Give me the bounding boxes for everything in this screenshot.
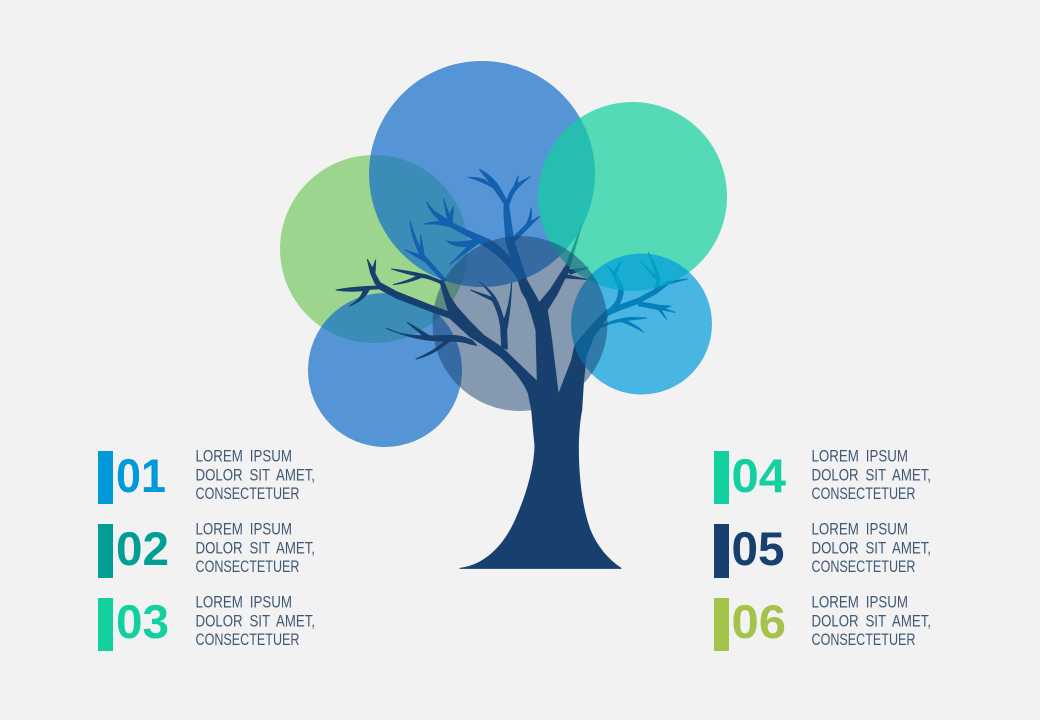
circle: lower-left blue: [308, 293, 462, 447]
text 03: DOLOR SIT AMET,: [196, 612, 315, 630]
lower-left branch: [387, 322, 477, 359]
text 06: DOLOR SIT AMET,: [812, 612, 931, 630]
bar 01: [98, 451, 113, 504]
text 04: DOLOR SIT AMET,: [812, 466, 931, 484]
number 06: 06: [732, 595, 786, 648]
circle: cyan: [571, 254, 712, 394]
text 06: [812, 594, 931, 649]
item 01: [98, 448, 315, 504]
text 02: [196, 520, 315, 576]
circle: top blue: [369, 61, 595, 287]
number 01: 01: [116, 449, 166, 502]
text 06: LOREM IPSUM: [812, 594, 908, 612]
mid-left navy twigs: [392, 269, 443, 285]
text 02: CONSECTETUER: [196, 558, 300, 576]
item 03: [98, 594, 315, 651]
text 05: [812, 520, 931, 576]
text 01: LOREM IPSUM: [196, 448, 292, 466]
text 04: LOREM IPSUM: [812, 448, 908, 466]
circle: centre grey-navy: [432, 236, 608, 411]
bar 06: [714, 598, 729, 651]
right upward branch: [607, 261, 623, 313]
number 05: 05: [732, 522, 784, 575]
bar 02: [98, 524, 113, 578]
bar 03: [98, 598, 113, 651]
number 04: 04: [732, 449, 786, 502]
tree trunk and main limbs: [367, 203, 687, 568]
text 03: CONSECTETUER: [196, 631, 300, 649]
item 05: [714, 520, 931, 578]
text 04: [812, 448, 931, 503]
text 02: DOLOR SIT AMET,: [196, 540, 315, 558]
text 01: DOLOR SIT AMET,: [196, 466, 315, 484]
bar 04: [714, 451, 729, 504]
circle: teal: [538, 102, 727, 291]
inner sub-branch: [471, 282, 512, 349]
item 02: [98, 520, 315, 578]
circle: green: [280, 155, 468, 343]
upper-left branch lower twig: [447, 240, 478, 264]
right upper twigs: [641, 252, 660, 291]
text 03: [196, 594, 315, 649]
text 01: CONSECTETUER: [196, 485, 300, 503]
tree: [336, 169, 687, 568]
centre branch top twigs: [468, 169, 530, 205]
bar 05: [714, 524, 729, 578]
mid-left branch: [405, 221, 446, 281]
far-left twigs: [336, 286, 382, 306]
item 04: [714, 448, 931, 504]
right-up branch twigs: [565, 225, 588, 279]
right branch lower twigs: [602, 302, 675, 332]
item 06: [714, 594, 931, 651]
text 04: CONSECTETUER: [812, 485, 916, 503]
upper-left branch: [423, 220, 523, 283]
number 03: 03: [116, 595, 169, 648]
text 02: LOREM IPSUM: [196, 520, 292, 538]
text 06: CONSECTETUER: [812, 631, 916, 649]
text 05: CONSECTETUER: [812, 558, 916, 576]
text 05: DOLOR SIT AMET,: [812, 540, 931, 558]
text 03: LOREM IPSUM: [196, 594, 292, 612]
number 02: 02: [116, 522, 169, 575]
text 01: [196, 448, 315, 503]
upper-left branch tip twigs: [427, 198, 453, 223]
text 05: LOREM IPSUM: [812, 520, 908, 538]
centre branch side twigs: [513, 208, 540, 241]
